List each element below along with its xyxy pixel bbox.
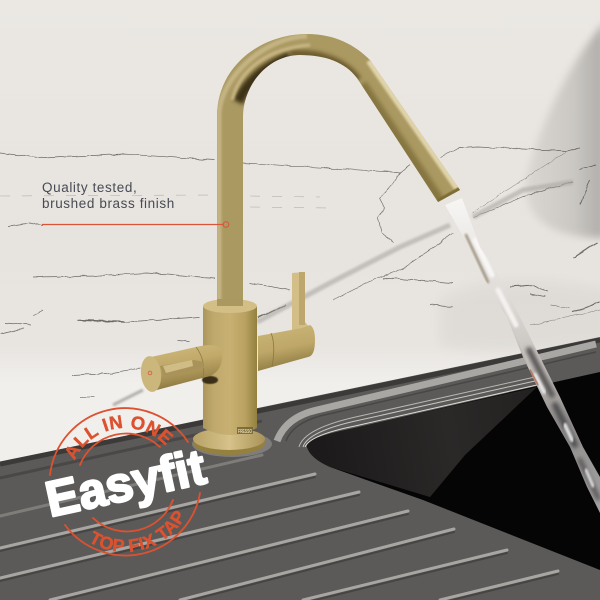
right handle (258, 272, 315, 371)
badge: Easyfit (40, 407, 211, 556)
badge wordmark: Easyfit (40, 438, 211, 528)
faucet base (193, 431, 265, 455)
sink basin (299, 372, 600, 570)
badge bottom text: TOP FIX TAP (92, 510, 182, 552)
callout text: Quality tested, (42, 180, 137, 195)
water stream (440, 190, 600, 520)
faucet: FRESSO (238, 429, 252, 435)
callout leader line (42, 222, 229, 227)
marble wall background (0, 0, 600, 480)
faucet body (203, 306, 257, 435)
callout: finish (42, 180, 229, 227)
faucet (139, 20, 480, 457)
badge rings (50, 408, 200, 556)
faucet neck and spout (217, 34, 460, 299)
body engraved logo (237, 427, 253, 434)
badge top text: ALL IN ONE (66, 415, 174, 460)
sink worktop (0, 337, 600, 600)
callout text: brushed brass finish (42, 196, 175, 211)
hot water dot (148, 371, 152, 375)
left handle (139, 345, 222, 393)
draining grooves (0, 455, 558, 600)
drain ring (192, 431, 272, 457)
